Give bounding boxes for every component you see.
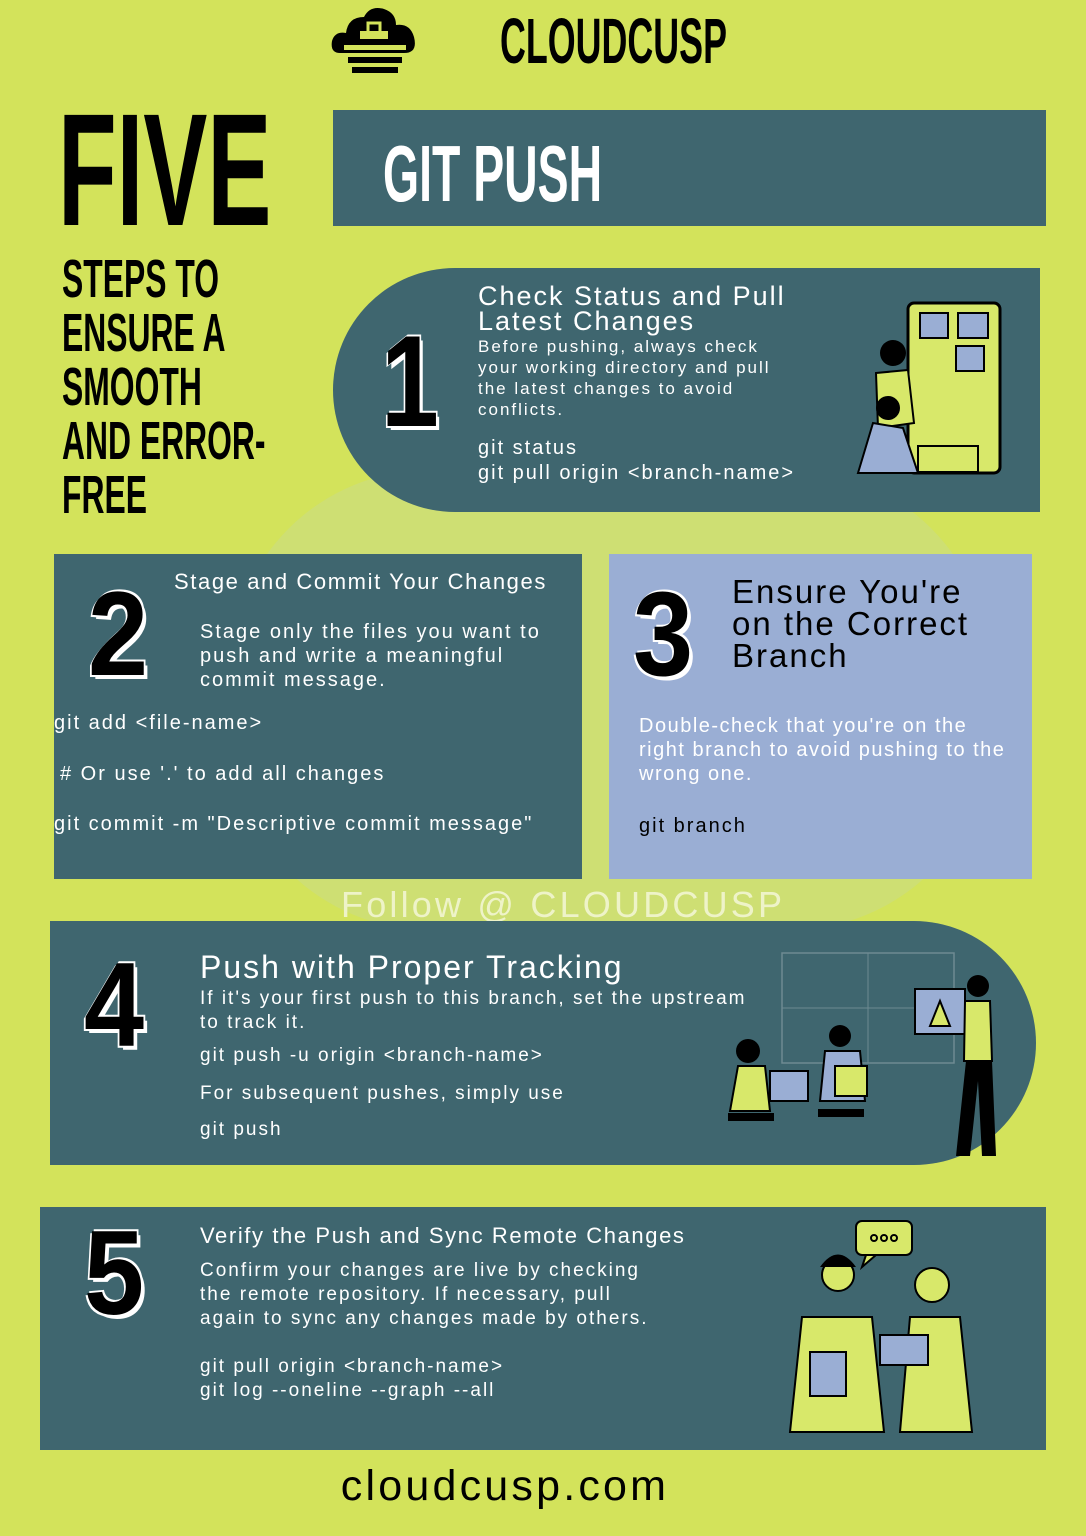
panel: step 5: git pull origin <branch-name> xyxy=(200,1356,504,1377)
panel: step 5: again to sync any changes made by others. xyxy=(200,1308,649,1329)
banner: GIT PUSH: GIT PUSH xyxy=(383,129,602,218)
step 3 text: Branch xyxy=(732,637,849,674)
panel: step 3 xyxy=(609,554,1032,879)
title: FIVE: FIVE xyxy=(58,80,271,259)
panel: step 5: the remote repository. If necessary, pull xyxy=(200,1284,612,1305)
number 2: 2 xyxy=(88,567,148,701)
illustration: team meeting xyxy=(728,952,996,1156)
subtitle: SMOOTH xyxy=(62,357,202,417)
panel: step 2: # Or use '.' to add all changes xyxy=(60,763,385,785)
step 4 text: Push with Proper Tracking xyxy=(200,949,624,985)
panel: step 2: push and write a meaningful xyxy=(200,645,504,667)
step 2 text: Stage and Commit Your Changes xyxy=(174,569,547,594)
step 3 text: on the Correct xyxy=(732,605,969,642)
step 5 text: Verify the Push and Sync Remote Changes xyxy=(200,1223,686,1248)
step 1 text xyxy=(478,281,786,336)
subtitle: AND ERROR- xyxy=(62,411,266,471)
footer url: cloudcusp.com xyxy=(341,1462,669,1510)
illustration: two people chatting xyxy=(788,1220,974,1433)
panel: step 4: to track it. xyxy=(200,1012,306,1033)
panel: step 1: Before pushing, always check xyxy=(478,337,759,356)
panel: step 3: right branch to avoid pushing to the xyxy=(639,739,1005,761)
panel: step 4 xyxy=(50,921,1036,1165)
panel: step 3: git branch xyxy=(639,815,747,837)
subtitle: ENSURE A xyxy=(62,303,225,363)
panel: step 1: git status xyxy=(478,437,578,459)
subtitle: STEPS TO xyxy=(62,249,219,309)
panel: step 2: git add <file-name> xyxy=(54,712,263,734)
subtitle xyxy=(62,249,266,525)
number 5: 5 xyxy=(84,1206,144,1340)
panel: step 2: Stage only the files you want to xyxy=(200,621,541,643)
number 1: 1 xyxy=(381,308,439,454)
illustration: puzzle board people xyxy=(856,302,1002,474)
panel: step 5 xyxy=(40,1207,1046,1450)
panel: step 1 xyxy=(333,268,1040,512)
logo icon: cloud xyxy=(332,8,415,73)
panel: step 4: git push -u origin <branch-name> xyxy=(200,1045,544,1066)
panel: step 5: git log --oneline --graph --all xyxy=(200,1380,495,1401)
panel: step 1: the latest changes to avoid xyxy=(478,379,734,398)
banner: GIT PUSH xyxy=(333,110,1046,226)
panel: step 4: For subsequent pushes, simply use xyxy=(200,1083,565,1104)
panel: step 5: Confirm your changes are live by checking xyxy=(200,1260,640,1281)
step 1 text: Check Status and Pull xyxy=(478,281,786,311)
step 1 text: Latest Changes xyxy=(478,306,695,336)
panel: step 1: your working directory and pull xyxy=(478,358,771,377)
step 3 text xyxy=(732,573,969,674)
number 3: 3 xyxy=(633,567,693,701)
panel: step 1: git pull origin <branch-name> xyxy=(478,462,795,484)
panel: step 4: If it's your first push to this branch, set the upstream xyxy=(200,988,746,1009)
background cloud decoration xyxy=(230,470,990,930)
follow text: Follow @ CLOUDCUSP xyxy=(341,884,785,925)
panel: step 3: wrong one. xyxy=(639,763,753,785)
brand name: CLOUDCUSP xyxy=(500,5,727,77)
panel: step 2: git commit -m "Descriptive commit message" xyxy=(54,813,533,835)
panel: step 4: git push xyxy=(200,1119,283,1140)
number 4: 4 xyxy=(84,938,144,1072)
subtitle: FREE xyxy=(62,465,147,525)
panel: step 1: conflicts. xyxy=(478,400,564,419)
step 3 text: Ensure You're xyxy=(732,573,962,610)
panel: step 2 xyxy=(54,554,582,879)
panel: step 3: Double-check that you're on the xyxy=(639,715,967,737)
panel: step 2: commit message. xyxy=(200,669,387,691)
